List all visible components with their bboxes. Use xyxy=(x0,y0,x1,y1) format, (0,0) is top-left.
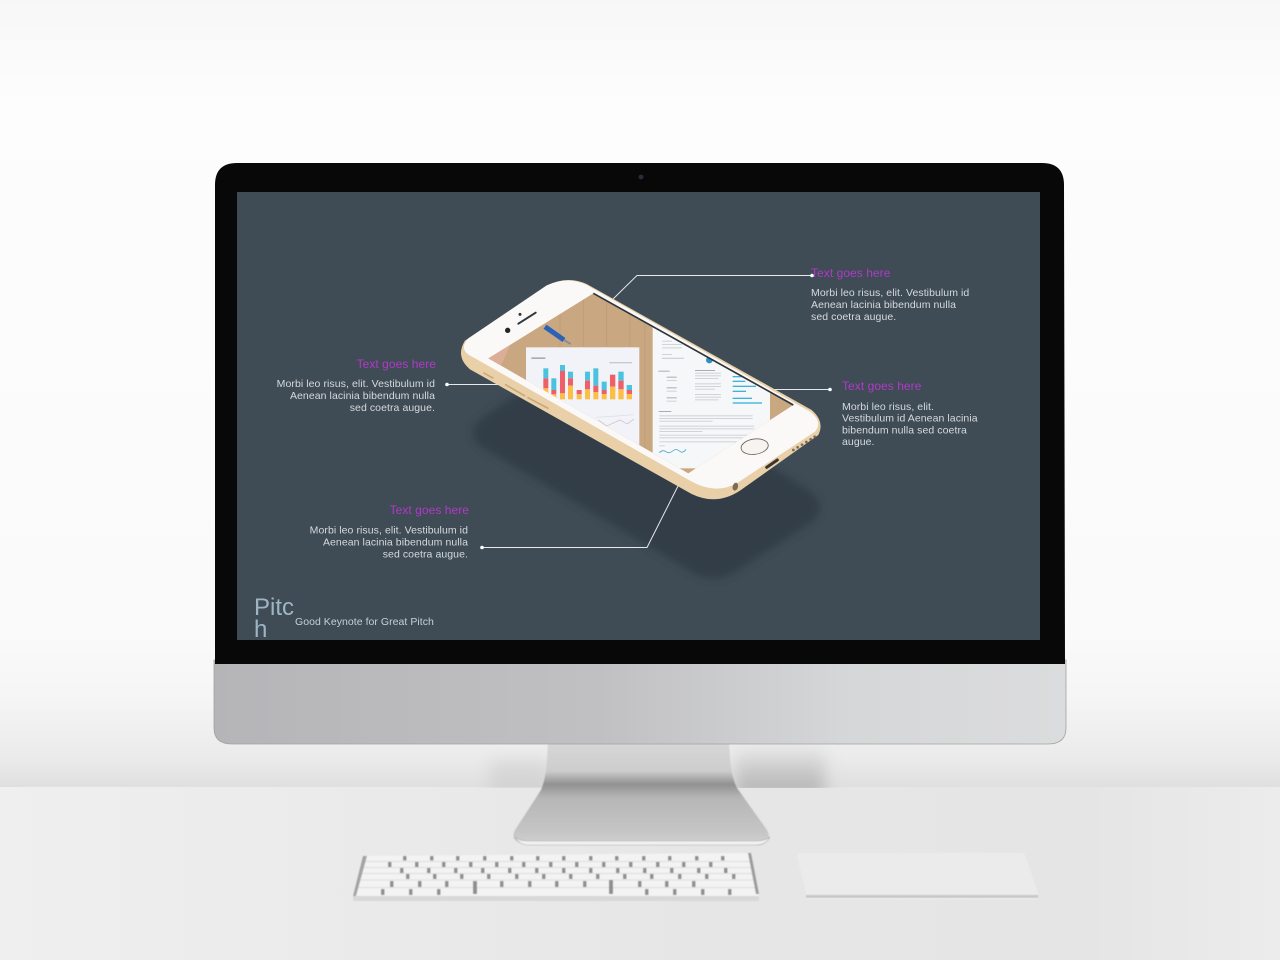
callout: left: Aenean lacinia bibendum nulla xyxy=(290,390,435,402)
brand title: Pitc xyxy=(254,594,294,621)
sensor dot xyxy=(518,313,521,316)
phone screen photo xyxy=(483,290,800,477)
home button xyxy=(740,437,769,456)
earpiece xyxy=(518,313,536,324)
callout: bottom: Text goes here xyxy=(390,503,469,517)
callout: right: bibendum nulla sed coetra xyxy=(842,424,967,436)
callout: top right: sed coetra augue. xyxy=(811,311,896,323)
leader line: bottom xyxy=(480,486,678,549)
monitor bezel xyxy=(215,163,1065,664)
phone white face xyxy=(464,280,818,489)
callout: top right xyxy=(811,266,969,323)
bar chart xyxy=(531,357,632,399)
brand title: h xyxy=(254,616,267,643)
pen xyxy=(545,327,571,344)
front camera xyxy=(505,328,510,333)
room background xyxy=(0,740,1280,960)
line chart xyxy=(597,415,634,426)
phone gold body xyxy=(461,280,821,499)
leader line: top right xyxy=(610,274,814,302)
callout: left: sed coetra augue. xyxy=(350,402,435,414)
callout: left xyxy=(277,357,436,414)
callout: right xyxy=(842,379,978,448)
monitor chin xyxy=(214,660,1066,744)
keyboard key gaps xyxy=(381,856,736,895)
trackpad xyxy=(797,853,1038,899)
hand xyxy=(489,346,510,366)
callout: right: Text goes here xyxy=(842,379,922,393)
callout: top right: Text goes here xyxy=(811,266,891,280)
screen top shadow edge xyxy=(593,293,793,405)
screen xyxy=(237,192,1040,640)
left paper xyxy=(526,347,639,447)
phone illustration xyxy=(461,280,821,499)
leader line: right xyxy=(770,388,832,391)
callout: bottom: Morbi leo risus, elit. Vestibulum id xyxy=(310,524,468,536)
right paper xyxy=(653,327,770,468)
callout: top right: Morbi leo risus, elit. Vestibulum id xyxy=(811,287,969,299)
phone shadow xyxy=(473,392,820,579)
callout: right: augue. xyxy=(842,436,875,448)
callout: right: Vestibulum id Aenean lacinia xyxy=(842,412,978,424)
callout: left: Text goes here xyxy=(357,357,436,371)
phone side buttons xyxy=(483,373,549,409)
charging port xyxy=(767,460,777,467)
leader line: left xyxy=(445,383,500,386)
brand title xyxy=(256,598,294,637)
monitor stand xyxy=(513,740,770,845)
callout: bottom: Aenean lacinia bibendum nulla xyxy=(323,536,468,548)
callout: right: Morbi leo risus, elit. xyxy=(842,401,934,413)
headphone jack xyxy=(732,482,739,491)
tagline: Good Keynote for Great Pitch xyxy=(295,616,434,628)
webcam xyxy=(639,175,643,179)
callout: left: Morbi leo risus, elit. Vestibulum id xyxy=(277,378,435,390)
resume text xyxy=(658,341,754,446)
callout: bottom xyxy=(310,503,469,560)
keyboard xyxy=(353,853,759,901)
callout: bottom: sed coetra augue. xyxy=(383,548,468,560)
wood desk xyxy=(483,290,800,477)
signature xyxy=(659,449,686,453)
callout: top right: Aenean lacinia bibendum nulla xyxy=(811,299,956,311)
speaker holes xyxy=(792,435,816,451)
resume blue accents xyxy=(706,357,762,404)
monitor xyxy=(214,163,1066,744)
